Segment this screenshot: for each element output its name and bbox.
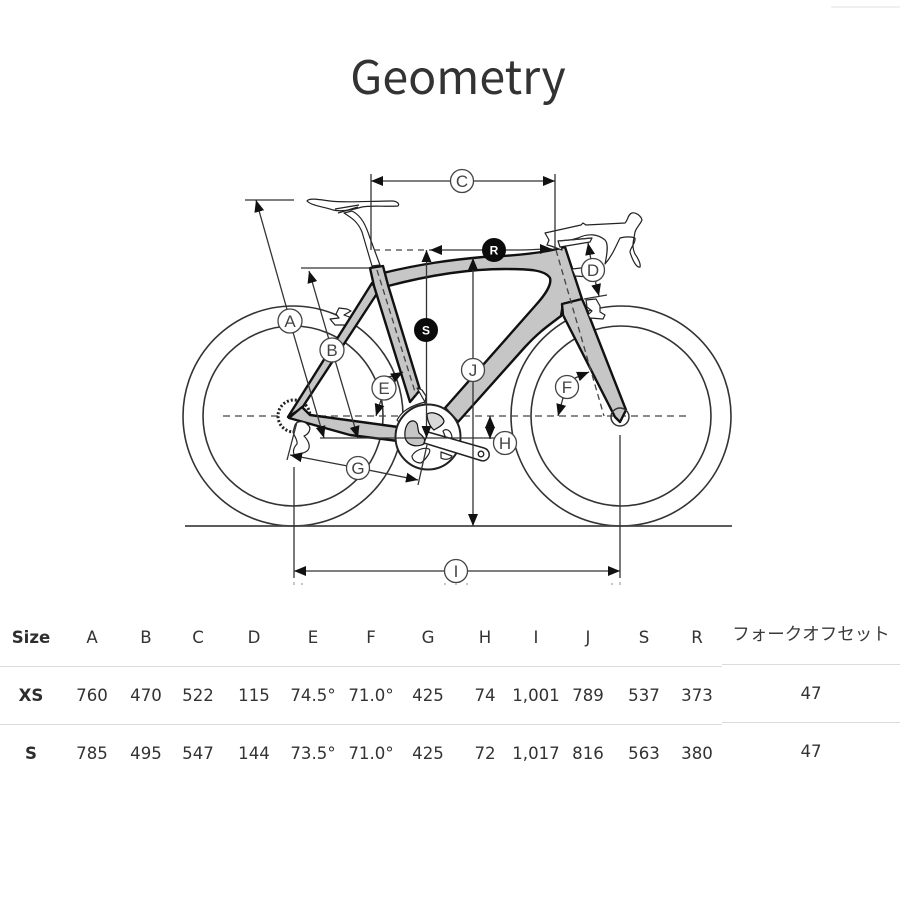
table header row: B	[140, 628, 152, 647]
badge J: J	[469, 361, 477, 380]
dimension R	[374, 249, 552, 250]
table header row: Size	[12, 628, 50, 647]
table row XS: 74	[474, 686, 496, 705]
badge F	[556, 376, 578, 398]
dimension H	[320, 416, 505, 439]
seat post	[344, 211, 380, 266]
badge B	[320, 338, 344, 362]
table row S: 380	[681, 744, 713, 763]
frame: seat tube	[370, 266, 420, 402]
table row XS: 522	[182, 686, 214, 705]
badge E: E	[378, 379, 390, 398]
badge J	[462, 358, 484, 382]
badge C	[450, 170, 474, 192]
badge E	[372, 376, 396, 400]
bike geometry diagram	[183, 170, 732, 585]
rear cassette	[278, 400, 310, 432]
frame: fork	[562, 299, 626, 422]
axle centre line	[223, 415, 690, 417]
table header row: A	[86, 628, 98, 647]
badge A: A	[284, 312, 296, 331]
rear wheel	[183, 306, 403, 526]
rear derailleur	[293, 422, 310, 456]
callout badges	[278, 170, 604, 582]
table row S: 73.5°	[290, 744, 336, 763]
badge G: G	[351, 459, 365, 478]
table row S: 72	[474, 744, 496, 763]
badge C: C	[456, 172, 468, 191]
table row S: 785	[76, 744, 108, 763]
badge A	[278, 309, 302, 333]
table row XS: 74.5°	[290, 686, 336, 705]
front wheel	[511, 306, 731, 526]
badge D	[582, 258, 604, 282]
table row S	[25, 742, 822, 763]
badge S: S	[422, 324, 430, 338]
table header row: D	[248, 628, 260, 647]
table header row: S	[639, 628, 649, 647]
dimension G	[287, 422, 427, 485]
ground line	[185, 525, 732, 527]
badge I: I	[454, 562, 458, 581]
badge S	[414, 318, 438, 342]
frame: chain stay	[289, 407, 398, 441]
table row XS: 470	[130, 686, 162, 705]
badge I	[444, 560, 468, 582]
front brake	[586, 299, 605, 319]
table row S: S	[25, 744, 37, 763]
table header row: J	[585, 628, 590, 647]
badge D: D	[587, 261, 599, 280]
saddle	[307, 199, 399, 266]
badge H: H	[499, 434, 511, 453]
crankset	[396, 404, 489, 470]
rear brake	[330, 308, 352, 325]
table header row	[12, 621, 890, 647]
table row XS: 537	[628, 686, 660, 705]
table header row: フォークオフセット	[732, 621, 890, 646]
table row S: 495	[130, 744, 162, 763]
frame: seat stay	[288, 283, 378, 417]
table row XS: 760	[76, 686, 108, 705]
table header row: R	[691, 628, 703, 647]
badge R	[482, 238, 506, 262]
table header row: H	[479, 628, 491, 647]
handlebar	[545, 213, 642, 319]
table row XS: 115	[238, 686, 270, 705]
dimension A	[245, 200, 324, 438]
table row S: 47	[800, 742, 822, 761]
table row S: 425	[412, 744, 444, 763]
crank arm	[424, 432, 489, 461]
frame: top tube and down tube	[382, 247, 582, 422]
dimension S	[426, 250, 428, 438]
table row XS	[19, 684, 822, 705]
badge B: B	[326, 341, 338, 360]
table row S: 71.0°	[348, 744, 394, 763]
table row XS: 425	[412, 686, 444, 705]
table row S: 1,017	[512, 744, 560, 763]
table row XS: XS	[19, 686, 43, 705]
badge R: R	[490, 244, 499, 258]
table row XS: 373	[681, 686, 713, 705]
dimension F	[558, 372, 589, 416]
dimension J	[472, 258, 474, 526]
table row XS: 71.0°	[348, 686, 394, 705]
dimension I	[294, 435, 620, 585]
dimension E	[376, 372, 403, 416]
dimension B	[301, 268, 370, 438]
table row XS: 1,001	[512, 686, 560, 705]
table row S: 547	[182, 744, 214, 763]
table row S: 816	[572, 744, 604, 763]
front axle	[611, 408, 629, 426]
steering axis	[377, 250, 604, 416]
table header row: I	[534, 628, 538, 647]
table header row: F	[366, 628, 376, 647]
table row S: 563	[628, 744, 660, 763]
dimension D	[558, 238, 607, 299]
geometry table	[0, 621, 900, 763]
front derailleur	[397, 388, 426, 422]
dimension lines	[245, 174, 620, 585]
table header row: C	[192, 628, 204, 647]
dimension C	[371, 174, 555, 250]
table header row: E	[308, 628, 318, 647]
badge G	[346, 456, 370, 480]
table header row: G	[422, 628, 434, 647]
table row XS: 47	[800, 684, 822, 703]
table row S: 144	[238, 744, 270, 763]
badge H	[494, 432, 516, 454]
badge F: F	[562, 378, 572, 397]
table row XS: 789	[572, 686, 604, 705]
title: Geometry	[350, 41, 566, 108]
